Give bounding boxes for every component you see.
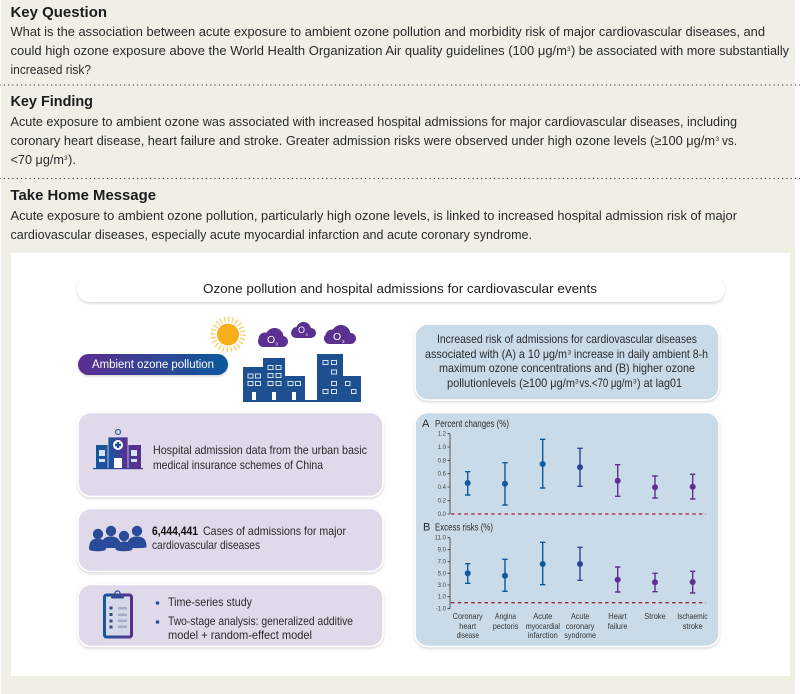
text block: key finding body: vs. xyxy=(722,133,737,148)
text block: key finding body: coronary heart disease, heart failure and stroke. Greater admission risks were observed under high ozone levels (≥100 μg/m xyxy=(10,133,715,148)
chart B error bars xyxy=(465,542,696,593)
section: take home message xyxy=(10,187,738,242)
chart B y axis: 9.0 xyxy=(438,548,447,554)
text: risk description: 3 xyxy=(568,350,572,356)
panel: graphical abstract xyxy=(11,253,790,676)
text: study design list xyxy=(156,595,353,642)
x axis category labels: failure xyxy=(608,621,628,631)
text: study design list: Time-series study xyxy=(168,595,252,609)
x axis category labels: myocardial xyxy=(526,621,560,631)
x axis category labels: syndrome xyxy=(564,630,596,640)
chart A y axis xyxy=(438,432,450,518)
panel: study design xyxy=(78,584,383,646)
x axis category labels: Angina xyxy=(495,611,516,621)
text: hospital admission data: Hospital admission data from the urban basic xyxy=(153,443,367,457)
x axis category labels: Coronary xyxy=(453,611,483,621)
chart A y axis: 0.2 xyxy=(438,499,447,505)
chart B y axis xyxy=(435,536,450,613)
text block: key finding body: Acute exposure to ambient ozone was associated with increased hospital admissions for major cardiovascular diseases, including xyxy=(10,114,737,129)
chart A y axis: 0.0 xyxy=(438,512,447,518)
text: risk description: maximum ozone concentrations and (B) higher ozone xyxy=(439,361,695,375)
x axis category labels: coronary xyxy=(566,621,595,631)
chart B heading xyxy=(423,522,493,534)
chart A y axis: 0.4 xyxy=(438,485,447,491)
text block: key finding body: 3 xyxy=(64,155,68,162)
chart A error bars xyxy=(465,439,696,505)
chart B y axis: 7.0 xyxy=(438,560,447,566)
text: risk description xyxy=(425,332,708,390)
text: study design list: model + random-effect model xyxy=(168,628,312,642)
title pill xyxy=(77,277,725,302)
x axis category labels: heart xyxy=(459,621,477,631)
chart B y axis: -1.0 xyxy=(436,607,447,613)
label pill: ambient ozone pollution xyxy=(78,354,228,375)
icon: clipboard xyxy=(104,591,132,637)
text: cases of admissions: Cases of admissions for major xyxy=(203,524,346,538)
chart B heading: Excess risks (%) xyxy=(435,522,493,534)
chart A y axis: 1.0 xyxy=(438,445,447,451)
section: key finding xyxy=(10,93,737,167)
text: risk description: increase in daily ambient 8-h xyxy=(574,347,708,361)
chart A y axis: 0.8 xyxy=(438,458,447,464)
x axis category labels: Ischaemic xyxy=(677,611,708,621)
x axis category labels: Heart xyxy=(608,611,627,621)
text: risk description: vs.<70 μg/m xyxy=(580,376,632,390)
icon: ozone clouds xyxy=(258,322,356,347)
icon: ozone clouds: 3 xyxy=(342,339,345,344)
text: risk description: associated with (A) a 10 μg/m xyxy=(425,347,567,361)
icon: ozone clouds: O xyxy=(267,334,275,346)
x axis category labels: disease xyxy=(457,630,479,640)
text block: key question body xyxy=(10,24,789,77)
text block: key question body: could high ozone exposure above the World Health Organization Air quality guidelines (100 μg/m xyxy=(10,43,567,58)
text block: key finding body: ). xyxy=(68,152,76,167)
icon: sun xyxy=(213,320,243,350)
text: study design list: Two-stage analysis: generalized additive xyxy=(168,614,353,628)
chart B y axis: 1.0 xyxy=(438,595,447,601)
text: hospital admission data xyxy=(153,443,367,472)
text block: key question body: increased risk? xyxy=(10,62,91,77)
heading: key finding: Key Finding xyxy=(10,93,93,110)
chart A heading xyxy=(422,418,509,430)
text block: take home body: Acute exposure to ambient ozone pollution, particularly high ozone levels, is linked to increased hospital admission risk of major xyxy=(10,208,738,223)
chart A y axis: 1.2 xyxy=(438,432,447,438)
text block: key question body: 3 xyxy=(567,46,571,53)
icon: ozone clouds: O xyxy=(298,325,305,335)
title pill: Ozone pollution and hospital admissions for cardiovascular events xyxy=(203,281,598,296)
icon: people xyxy=(89,526,146,551)
chart A: percent changes xyxy=(422,418,706,518)
x axis category labels xyxy=(453,611,708,640)
icon: ozone clouds: 3 xyxy=(306,332,308,337)
text block: key finding body: 3 xyxy=(716,136,720,143)
heading: take home message: Take Home Message xyxy=(10,187,156,204)
text block: key question body: ) be associated with more substantially xyxy=(571,43,789,58)
x axis category labels: infarction xyxy=(528,630,558,640)
text block: key question body: What is the association between acute exposure to ambient ozone pollution and morbidity risk of major cardiovascular diseases, and xyxy=(10,24,765,39)
chart B: excess risks xyxy=(423,522,708,640)
icon: city buildings xyxy=(243,354,361,402)
x axis category labels: Acute xyxy=(533,611,553,621)
text block: key finding body xyxy=(10,114,737,167)
text block: key finding body: <70 μg/m xyxy=(10,152,64,167)
icon: ozone clouds: 3 xyxy=(276,342,278,346)
text: risk description: 3 xyxy=(633,378,637,386)
text block: take home body: cardiovascular diseases, especially acute myocardial infarction and acute coronary syndrome. xyxy=(10,227,532,242)
chart B heading: B xyxy=(423,522,430,534)
x axis category labels: Stroke xyxy=(644,611,666,621)
label pill: ambient ozone pollution: Ambient ozone pollution xyxy=(92,359,214,371)
section: key question xyxy=(10,4,789,77)
x axis category labels: pectoris xyxy=(493,621,518,631)
panel: charts xyxy=(415,412,719,646)
x axis category labels: Acute xyxy=(571,611,590,621)
text: risk description: 3 xyxy=(575,378,579,386)
chart A heading: A xyxy=(422,418,430,430)
text: cases of admissions xyxy=(152,524,346,552)
text: cases of admissions: cardiovascular diseases xyxy=(152,538,260,552)
icon: ozone clouds: O xyxy=(333,331,341,343)
chart B y axis: 5.0 xyxy=(438,571,447,577)
panel: case count xyxy=(78,508,383,572)
text: cases of admissions: 6,444,441 xyxy=(152,524,198,538)
text: risk description: Increased risk of admissions for cardiovascular diseases xyxy=(437,332,697,346)
heading: key question: Key Question xyxy=(10,4,107,21)
text block: take home body xyxy=(10,208,738,242)
x axis category labels: stroke xyxy=(683,621,703,631)
icon: hospital xyxy=(93,430,143,469)
text: risk description: pollutionlevels (≥100 μg/m xyxy=(447,376,575,390)
chart A heading: Percent changes (%) xyxy=(435,418,509,430)
text: risk description: ) at lag01 xyxy=(637,376,682,390)
text: hospital admission data: medical insurance schemes of China xyxy=(153,458,323,472)
chart B y axis: 3.0 xyxy=(438,583,447,589)
panel: hospital data xyxy=(78,412,383,496)
chart A y axis: 0.6 xyxy=(438,472,447,478)
panel: risk description xyxy=(415,324,719,400)
chart B y axis: 11.0 xyxy=(435,536,447,542)
